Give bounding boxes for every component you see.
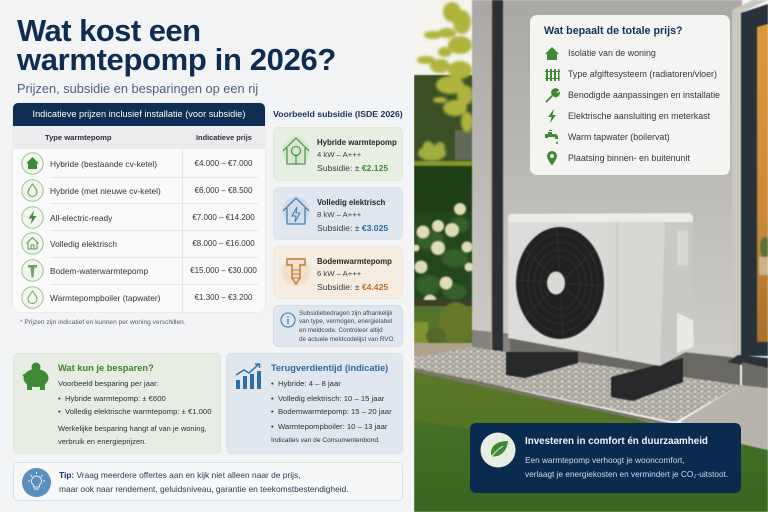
panel: payback time: • Warmtepompboiler: 10 – 13 jaar	[271, 422, 388, 431]
panel: price table	[13, 103, 265, 312]
savings heading: Wat kun je besparen?	[58, 363, 154, 373]
title: warmtepomp in 2026?	[17, 42, 336, 77]
heading: Wat bepaalt de totale prijs?	[544, 25, 683, 37]
item: aanpassingen: Benodigde aanpassingen en installatie	[568, 90, 720, 100]
note: subsidy info: van type, vermogen, energielabel	[299, 318, 392, 325]
note: subsidy info: en meldcode. Controleer altijd	[299, 327, 383, 334]
window	[741, 4, 768, 356]
tip text: maar ook naar rendement, geluidsniveau, garantie en teekomstbestendigheid.	[59, 484, 349, 494]
callout text: Een warmtepomp verhoogt je wooncomfort,	[525, 456, 685, 465]
row: volledig elektrisch: Volledig elektrisch	[50, 238, 117, 248]
card: hybride subsidie: Subsidie: ± €2.125	[317, 163, 388, 173]
column headings	[13, 126, 265, 149]
card: bodemwarmtepomp subsidie: 6 kW – A+++	[317, 269, 361, 278]
item: isolatie: Isolatie van de woning	[568, 48, 656, 58]
row: hybride nieuwe: €6.000 – €8.500	[195, 186, 252, 194]
row: bodem-water: Bodem-waterwarmtepomp	[50, 266, 148, 276]
icon: leaf	[480, 432, 516, 468]
row: hybride nieuwe	[21, 179, 252, 202]
row: volledig elektrisch: €8.000 – €16.000	[192, 238, 255, 248]
row: hybride nieuwe: Hybride (met nieuwe cv-ketel)	[50, 186, 161, 196]
paving	[680, 385, 768, 450]
item: tapwater	[545, 130, 670, 144]
tip text	[59, 470, 349, 494]
row: all-electric-ready: All-electric-ready	[50, 212, 112, 222]
panel: savings: • Hybride warmtepomp: ± €600	[58, 394, 166, 402]
item: plaatsing: Plaatsing binnen- en buitenunit	[568, 153, 690, 163]
row: bodem-water	[21, 259, 257, 282]
subsidy heading: Voorbeeld subsidie (ISDE 2026)	[273, 109, 403, 119]
card: hybride subsidie: Hybride warmtepomp	[317, 138, 397, 146]
savings text: Voorbeeld besparing per jaar:	[58, 379, 159, 388]
panel: savings: • Volledig elektrische warmtepomp: ± €1.000	[58, 407, 211, 416]
card: volledig elektrisch subsidie: 8 kW – A+++	[317, 210, 361, 219]
row: boiler: €1.300 – €3.200	[195, 292, 252, 302]
gravel	[414, 347, 740, 422]
card: bodemwarmtepomp subsidie: Bodemwarmtepomp	[317, 256, 392, 266]
note: subsidy info: Subsidiebedragen zijn afhankelijk	[299, 310, 392, 316]
row: hybride bestaande: €4.000 – €7.000	[195, 158, 252, 168]
card: hybride subsidie	[273, 127, 403, 181]
garden shrubs	[414, 212, 474, 320]
card: hybride subsidie: 4 kW – A+++	[317, 150, 361, 159]
item: elektrisch	[548, 109, 710, 123]
feet	[506, 352, 578, 378]
card: volledig elektrisch subsidie	[273, 187, 403, 240]
item: plaatsing	[547, 151, 690, 166]
downpipe	[491, 0, 503, 353]
card: bodemwarmtepomp subsidie	[273, 246, 403, 299]
panel: savings: Werkelijke besparing hangt af van je woning,	[58, 424, 207, 433]
panel: savings	[13, 353, 221, 454]
icon: bar chart	[236, 363, 261, 389]
panel: payback time: Indicaties van de Consumentenbond.	[271, 437, 380, 444]
row: all-electric-ready: €7.000 – €14.200	[192, 212, 255, 222]
note: subsidy info: de actuele meldcodelijst van RVO.	[299, 336, 395, 343]
item: tapwater: Warm tapwater (boilervat)	[568, 132, 670, 142]
fan	[516, 227, 604, 339]
sky	[414, 0, 474, 90]
callout: comfort and sustainability	[470, 423, 741, 493]
callout text	[525, 456, 728, 479]
photo: heat pump outside the house	[414, 0, 768, 512]
left background panel	[0, 0, 414, 512]
table header: Indicatieve prijzen inclusief installatie (voor subsidie)	[33, 109, 245, 119]
subtitle: Prijzen, subsidie en besparingen op een rij	[17, 81, 258, 96]
payback text: • Hybride: 4 – 8 jaar	[271, 379, 341, 388]
row: boiler: Warmtepompboiler (tapwater)	[50, 292, 160, 302]
row: bodem-water: €15.000 – €30.000	[190, 266, 257, 274]
panel: tip	[13, 462, 403, 501]
hedge	[414, 163, 472, 233]
card: volledig elektrisch subsidie: Subsidie: ± €3.025	[317, 223, 388, 233]
icon: light bulb	[22, 468, 51, 497]
column headings: Indicatieve prijs	[196, 133, 252, 142]
panel: payback time	[226, 353, 403, 454]
title: Wat kost een	[17, 13, 200, 48]
card: volledig elektrisch subsidie: Volledig elektrisch	[317, 198, 385, 206]
title	[16, 13, 336, 77]
row: hybride bestaande: Hybride (bestaande cv-ketel)	[50, 158, 157, 168]
panel: payback time: • Bodemwarmtepomp: 15 – 20 jaar	[271, 407, 392, 416]
panel: what determines price	[530, 15, 730, 175]
item: elektrisch: Elektrische aansluiting en meterkast	[568, 111, 710, 121]
panel: savings: verbruik en energieprijzen.	[58, 437, 146, 446]
heat pump body	[508, 217, 693, 366]
card: bodemwarmtepomp subsidie: Subsidie: ± €4.425	[317, 282, 388, 292]
column headings: Type warmtepomp	[45, 133, 112, 142]
item: afgifte: Type afgiftesysteem (radiatoren/vloer)	[568, 69, 717, 79]
table header	[13, 103, 265, 126]
note: subsidy info	[273, 305, 403, 347]
panel: payback time: • Volledig elektrisch: 10 – 15 jaar	[271, 394, 384, 402]
grass	[414, 365, 768, 512]
tip text: Tip: Vraag meerdere offertes aan en kijk niet alleen naar de prijs,	[59, 470, 300, 480]
row: boiler	[21, 286, 252, 309]
row: hybride bestaande	[21, 152, 252, 175]
row: all-electric-ready	[21, 206, 255, 229]
footnote: * Prijzen zijn indicatief en kunnen per woning verschillen.	[20, 319, 186, 326]
payback heading: Terugverdientijd (indicatie)	[271, 363, 388, 373]
row: volledig elektrisch	[21, 232, 255, 255]
callout heading: Investeren in comfort én duurzaamheid	[525, 436, 708, 446]
item: aanpassingen	[545, 88, 720, 103]
callout text: verlaagt je energiekosten en vermindert je CO₂-uitstoot.	[525, 470, 728, 479]
wall	[472, 0, 742, 358]
icon: piggy bank	[22, 362, 48, 390]
item: isolatie	[545, 47, 656, 60]
